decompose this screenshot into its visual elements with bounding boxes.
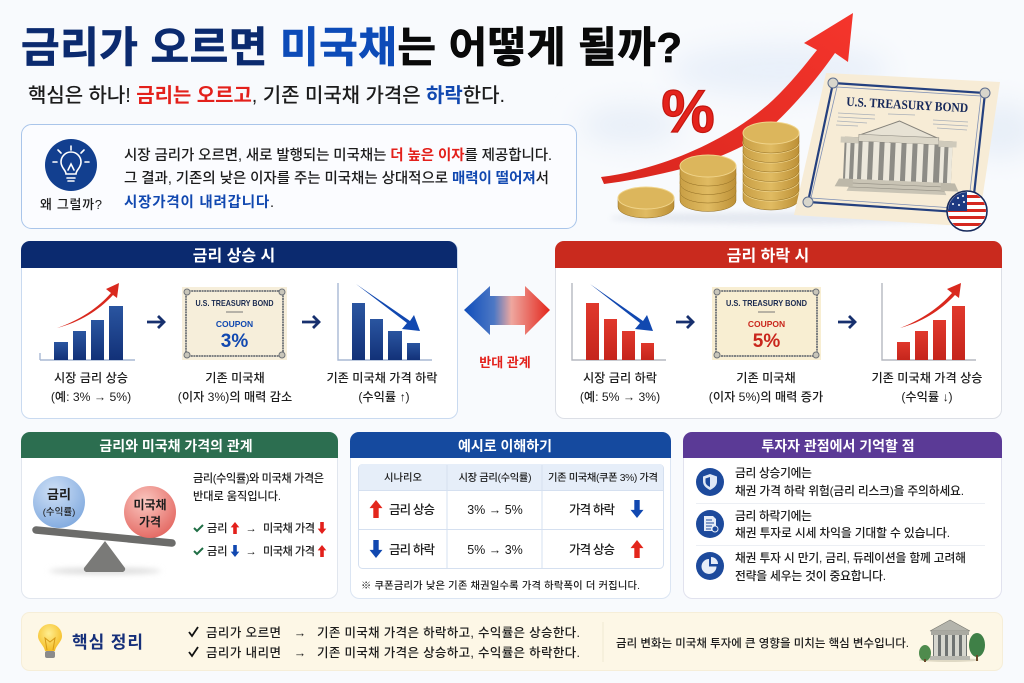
summary lines: 금리가 오르면 [206, 626, 281, 640]
heading: rate rise: 금리 상승 시 [193, 247, 275, 265]
explanation text: 시장 금리가 오르면, 새로 발행되는 미국채는 더 높은 이자를 제공합니다. [124, 147, 552, 164]
arrow [147, 316, 164, 328]
explanation text: 시장가격이 내려갑니다. [124, 194, 274, 211]
icon: pie chart [696, 552, 724, 580]
heading: relationship [21, 432, 338, 458]
point 1 [735, 466, 964, 498]
panel: example [350, 432, 671, 598]
seesaw illustration: 미국채 [133, 498, 167, 512]
heading: key summary: 핵심 정리 [72, 633, 143, 652]
icon: lightbulb [45, 139, 97, 191]
closing note: 금리 변화는 미국채 투자에 큰 영향을 미치는 핵심 변수입니다. [616, 636, 909, 650]
treasury bond certificate [794, 73, 1000, 227]
captions [580, 371, 983, 404]
captions: 기존 미국채 [736, 371, 796, 385]
captions [51, 371, 438, 404]
label: opposite relation: 반대 관계 [479, 355, 531, 370]
explanation text [124, 147, 552, 211]
arrow [838, 316, 855, 328]
seesaw illustration: 가격 [139, 514, 161, 529]
point 1: 금리 상승기에는 [735, 466, 812, 480]
icon: shield [696, 468, 724, 496]
label: why: 왜 그럴까? [40, 197, 102, 212]
heading: investor viewpoint: 투자자 관점에서 기억할 점 [761, 438, 915, 454]
arrow [302, 316, 319, 328]
double arrow: opposite relation [464, 286, 550, 370]
point 2: 채권 투자로 시세 차익을 기대할 수 있습니다. [735, 526, 950, 540]
table: 3% → 5% [467, 503, 523, 517]
point 3: 채권 투자 시 만기, 금리, 듀레이션을 함께 고려해 [735, 551, 966, 565]
bond card coupon 5% [712, 287, 821, 360]
percent sign: % [661, 78, 715, 145]
captions: 기존 미국채 [205, 371, 265, 385]
captions: (수익률 ↑) [358, 390, 410, 404]
panel: key summary [22, 612, 1002, 670]
seesaw illustration [33, 476, 176, 574]
explanation text: 그 결과, 기존의 낮은 이자를 주는 미국채는 상대적으로 매력이 떨어져서 [124, 170, 549, 187]
summary lines: → [294, 626, 306, 640]
captions: 기존 미국채 가격 상승 [871, 371, 983, 385]
heading: rate rise [21, 241, 457, 268]
summary lines: 기존 미국채 가격은 하락하고, 수익률은 상승한다. [317, 626, 580, 640]
captions: (예: 5% → 3%) [580, 390, 660, 404]
arrow [676, 316, 693, 328]
point 3: 전략을 세우는 것이 중요합니다. [735, 569, 886, 583]
chart: market rate falling [572, 283, 666, 360]
chart: bond price falling [338, 283, 432, 360]
captions: 시장 금리 상승 [54, 371, 128, 385]
treasury bond certificate: U.S. TREASURY BOND [846, 94, 969, 115]
heading: rate fall [555, 241, 1002, 268]
icon: US flag badge [945, 191, 989, 231]
captions: 시장 금리 하락 [583, 371, 657, 385]
captions: (수익률 ↓) [901, 390, 953, 404]
hero illustration [601, 13, 1000, 231]
rise row: → [245, 523, 257, 535]
title: 금리가 오르면 미국채는 어떻게 될까? [21, 24, 682, 71]
bond card coupon 5%: COUPON [748, 319, 785, 329]
summary lines [189, 626, 580, 660]
fall row [194, 545, 326, 558]
bond building [834, 118, 962, 196]
captions: (이자 5%)의 매력 증가 [709, 389, 823, 404]
panel: rate fall [555, 241, 1002, 418]
point 2 [735, 509, 950, 540]
bond card coupon 3%: 3% [221, 331, 248, 352]
heading: investor viewpoint [683, 432, 1002, 458]
heading: example: 예시로 이해하기 [458, 438, 552, 454]
heading: rate fall: 금리 하락 시 [727, 247, 809, 265]
rise row: 미국채 가격 [263, 522, 315, 535]
captions: 기존 미국채 가격 하락 [326, 371, 438, 385]
seesaw illustration: 금리 [47, 487, 71, 502]
summary lines: → [294, 646, 306, 660]
panel: why explanation [22, 124, 576, 228]
point 1: 채권 가격 하락 위험(금리 리스크)을 주의하세요. [735, 484, 964, 498]
chart: bond price rising [882, 283, 976, 360]
table [358, 464, 664, 569]
relationship text: 금리(수익률)와 미국채 가격은 [193, 472, 324, 485]
bond card coupon 3% [182, 287, 287, 360]
bond card coupon 3%: U.S. TREASURY BOND [196, 298, 274, 308]
icon: bank with trees [919, 620, 985, 662]
bond card coupon 3%: COUPON [216, 319, 253, 329]
panel: relationship [21, 432, 338, 598]
table: 가격 상승 [569, 543, 615, 557]
chart: market rate rising [40, 283, 135, 360]
captions: (이자 3%)의 매력 감소 [178, 389, 292, 404]
summary lines: 금리가 내리면 [206, 646, 281, 660]
heading: example [350, 432, 671, 458]
coin and bond shadows [610, 212, 970, 224]
point 2: 금리 하락기에는 [735, 509, 812, 523]
coin stacks [618, 122, 799, 218]
fall row: 금리 [207, 545, 228, 558]
point 3 [735, 551, 966, 583]
fall row: 미국채 가격 [263, 545, 315, 558]
relationship text [193, 472, 324, 503]
table: 5% → 3% [467, 543, 523, 557]
icon: bulb [38, 624, 62, 658]
captions: (예: 3% → 5%) [51, 390, 131, 404]
summary lines: 기존 미국채 가격은 상승하고, 수익률은 하락한다. [317, 646, 580, 660]
red rising arrow [601, 13, 853, 184]
bond card coupon 5%: 5% [753, 331, 780, 352]
table: 금리 하락 [389, 543, 435, 557]
table: 기존 미국채(쿠폰 3%) 가격 [548, 472, 658, 484]
table: 금리 상승 [389, 503, 435, 517]
relationship text: 반대로 움직입니다. [193, 489, 281, 503]
rise row [194, 522, 326, 535]
seesaw illustration: (수익률) [43, 506, 75, 518]
fall row: → [245, 546, 257, 558]
table: 시장 금리(수익률) [458, 472, 532, 484]
panel: investor viewpoint [683, 432, 1002, 598]
icon: document [696, 510, 724, 538]
bond card coupon 5%: U.S. TREASURY BOND [726, 298, 807, 308]
table footnote: ※ 쿠폰금리가 낮은 기존 채권일수록 가격 하락폭이 더 커집니다. [361, 579, 640, 592]
rise row: 금리 [207, 522, 228, 535]
table: 가격 하락 [569, 503, 615, 517]
panel: rate rise [21, 241, 458, 418]
subtitle: 핵심은 하나! 금리는 오르고, 기존 미국채 가격은 하락한다. [28, 84, 505, 107]
table: 시나리오 [384, 472, 422, 484]
heading: relationship: 금리와 미국채 가격의 관계 [99, 438, 253, 454]
